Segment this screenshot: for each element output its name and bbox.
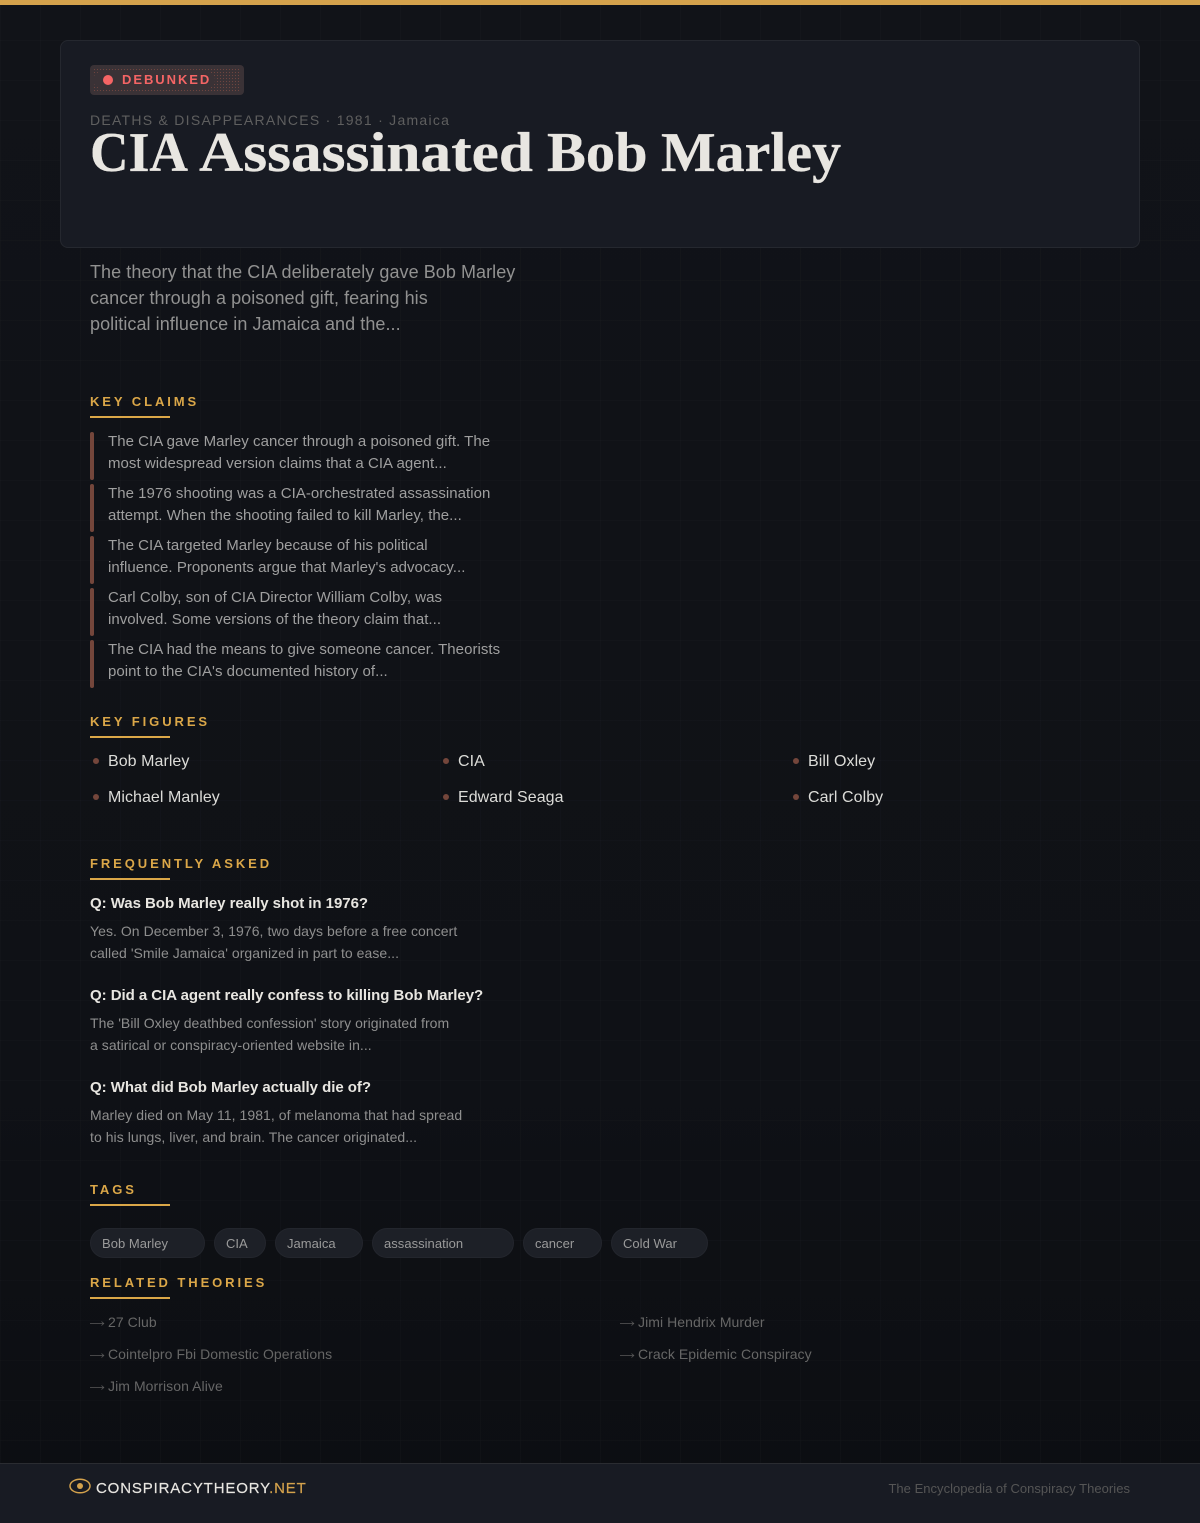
claim 4: Carl Colby, son of CIA Director William Colby, was <box>108 589 442 606</box>
figure: Bob Marley: Bob Marley <box>108 753 189 770</box>
faq 3: Marley died on May 11, 1981, of melanoma that had spread <box>90 1107 462 1123</box>
claim 5: point to the CIA's documented history of... <box>108 663 388 680</box>
faq 1: called 'Smile Jamaica' organized in part to ease... <box>90 945 399 961</box>
title: Marley <box>661 122 841 184</box>
claim 2 <box>90 484 490 532</box>
tag: Cold War: Cold War <box>623 1236 677 1251</box>
claim 3 <box>90 536 465 584</box>
faq 1 <box>90 895 458 961</box>
badge inner pill <box>93 72 215 88</box>
badge label: DEBUNKED <box>122 72 211 87</box>
claim 4: involved. Some versions of the theory claim that... <box>108 611 441 628</box>
faq 3: Q: What did Bob Marley actually die of? <box>90 1079 371 1096</box>
related: 27 Club: 27 Club <box>108 1314 157 1330</box>
claim 2: attempt. When the shooting failed to kill Marley, the... <box>108 507 462 524</box>
tag: CIA <box>214 1228 266 1258</box>
related: Cointelpro: Cointelpro Fbi Domestic Operations <box>108 1346 332 1362</box>
claim 5 <box>90 640 500 688</box>
footer tagline: The Encyclopedia of Conspiracy Theories <box>888 1481 1130 1496</box>
faq 2: Q: Did a CIA agent really confess to killing Bob Marley? <box>90 987 483 1004</box>
figure: CIA <box>443 753 485 770</box>
claim 3: The CIA targeted Marley because of his political <box>108 537 428 554</box>
related: Jimi Hendrix Murder: Jimi Hendrix Murder <box>638 1314 765 1330</box>
figure: Michael Manley: Michael Manley <box>108 789 220 806</box>
heading: tags: TAGS <box>90 1182 137 1197</box>
tag: Bob Marley <box>90 1228 205 1258</box>
faq 2: a satirical or conspiracy-oriented website in... <box>90 1037 372 1053</box>
faq 1: Q: Was Bob Marley really shot in 1976? <box>90 895 368 912</box>
title: Assassinated <box>199 122 533 184</box>
tag: Jamaica <box>275 1228 363 1258</box>
claim 1 <box>90 432 490 480</box>
tag: Cold War <box>611 1228 708 1258</box>
title: Bob <box>547 122 648 184</box>
category line: DEATHS & DISAPPEARANCES · 1981 · Jamaica <box>90 112 450 128</box>
title <box>90 122 841 184</box>
heading: key figures: KEY FIGURES <box>90 714 210 729</box>
faq 3 <box>90 1079 462 1145</box>
top accent bar <box>0 0 1200 5</box>
related: Jim Morrison: Jim Morrison Alive <box>108 1378 223 1394</box>
claim 1: The CIA gave Marley cancer through a poisoned gift. The <box>108 433 490 450</box>
claim 5: The CIA had the means to give someone cancer. Theorists <box>108 641 500 658</box>
heading: frequently asked: FREQUENTLY ASKED <box>90 856 272 871</box>
claim 4 <box>90 588 442 636</box>
title: CIA <box>90 122 188 184</box>
faq 2 <box>90 987 483 1053</box>
tag: assassination: assassination <box>384 1236 463 1251</box>
figure: Bill Oxley: Bill Oxley <box>808 753 875 770</box>
heading: related theories: RELATED THEORIES <box>90 1275 267 1290</box>
heading: key claims: KEY CLAIMS <box>90 394 199 409</box>
footer <box>0 1463 1200 1523</box>
badge dot <box>103 75 113 85</box>
claim 2: The 1976 shooting was a CIA-orchestrated assassination <box>108 485 490 502</box>
panel: header <box>60 40 1140 248</box>
tag: CIA: CIA <box>226 1236 248 1251</box>
intro text <box>90 262 516 334</box>
intro text: political influence in Jamaica and the... <box>90 314 401 334</box>
badge dither texture <box>93 68 241 92</box>
claim 3: influence. Proponents argue that Marley's advocacy... <box>108 559 465 576</box>
figure: Carl Colby: Carl Colby <box>808 789 883 806</box>
icon: eye <box>69 1478 91 1494</box>
tag: Bob Marley: Bob Marley <box>102 1236 168 1251</box>
faq 2: The 'Bill Oxley deathbed confession' story originated from <box>90 1015 449 1031</box>
related: Crack Epidemic: Crack Epidemic Conspiracy <box>638 1346 812 1362</box>
tag: cancer: cancer <box>535 1236 574 1251</box>
tag: cancer <box>523 1228 602 1258</box>
faq 3: to his lungs, liver, and brain. The cancer originated... <box>90 1129 417 1145</box>
figure: Edward Seaga: Edward Seaga <box>458 789 564 806</box>
faq 1: Yes. On December 3, 1976, two days before a free concert <box>90 923 457 939</box>
logo wordmark: CONSPIRACYTHEORY.NET <box>96 1480 307 1497</box>
tag: assassination <box>372 1228 514 1258</box>
figure: CIA: CIA <box>458 753 485 770</box>
claim 1: most widespread version claims that a CIA agent... <box>108 455 447 472</box>
intro text: cancer through a poisoned gift, fearing his <box>90 288 428 308</box>
tag: Jamaica: Jamaica <box>287 1236 336 1251</box>
intro text: The theory that the CIA deliberately gave Bob Marley <box>90 262 515 282</box>
badge: debunked <box>90 65 244 95</box>
